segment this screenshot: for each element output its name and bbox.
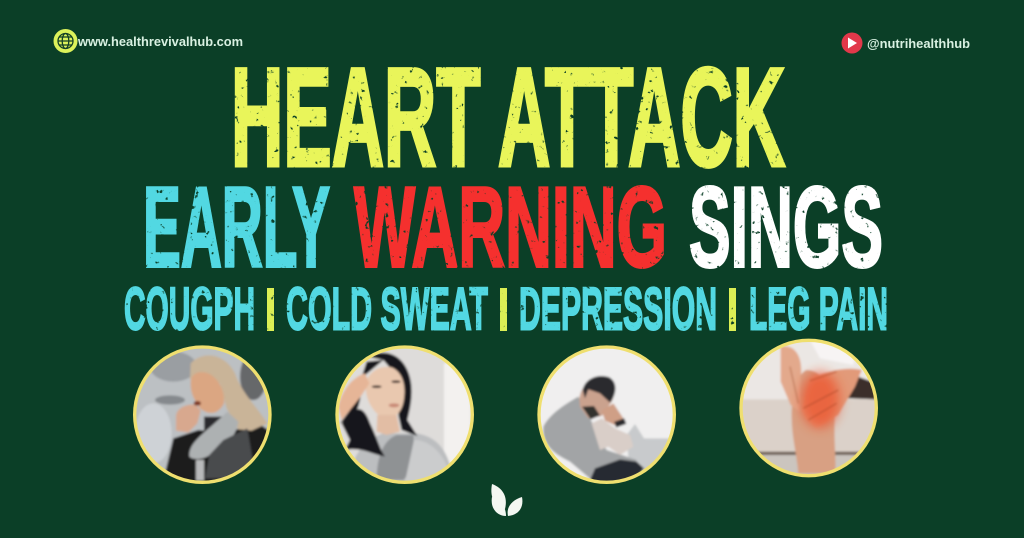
website text: www.healthrevivalhub.com <box>77 35 243 49</box>
symptom: cold sweat: COLD SWEAT <box>286 276 488 342</box>
website link <box>54 29 243 53</box>
photo ring <box>337 347 472 482</box>
subtitle: early warning sings: EARLY <box>143 164 330 292</box>
symptoms line <box>124 276 888 342</box>
photo ring <box>741 340 876 476</box>
word: warning: WARNING <box>354 164 667 292</box>
photo: woman coughing <box>133 347 273 483</box>
divider <box>500 288 507 331</box>
photo: depressed man <box>537 343 680 487</box>
photo ring <box>135 347 270 482</box>
photo: knee pain <box>737 340 880 480</box>
divider <box>729 288 736 331</box>
handle text: @nutrihealthhub <box>867 37 970 51</box>
symptoms line: COUGPH <box>124 276 255 342</box>
subtitle: early warning sings <box>143 164 883 292</box>
icon: globe <box>54 29 78 53</box>
icon: leaf logo <box>491 484 522 516</box>
photo: woman with cold sweat <box>333 347 477 483</box>
symptom: depression: DEPRESSION <box>519 276 717 342</box>
divider <box>267 288 274 331</box>
icon: play button <box>842 32 862 54</box>
photo ring <box>539 347 674 482</box>
youtube handle <box>842 32 970 54</box>
symptom: leg pain: LEG PAIN <box>749 276 888 342</box>
